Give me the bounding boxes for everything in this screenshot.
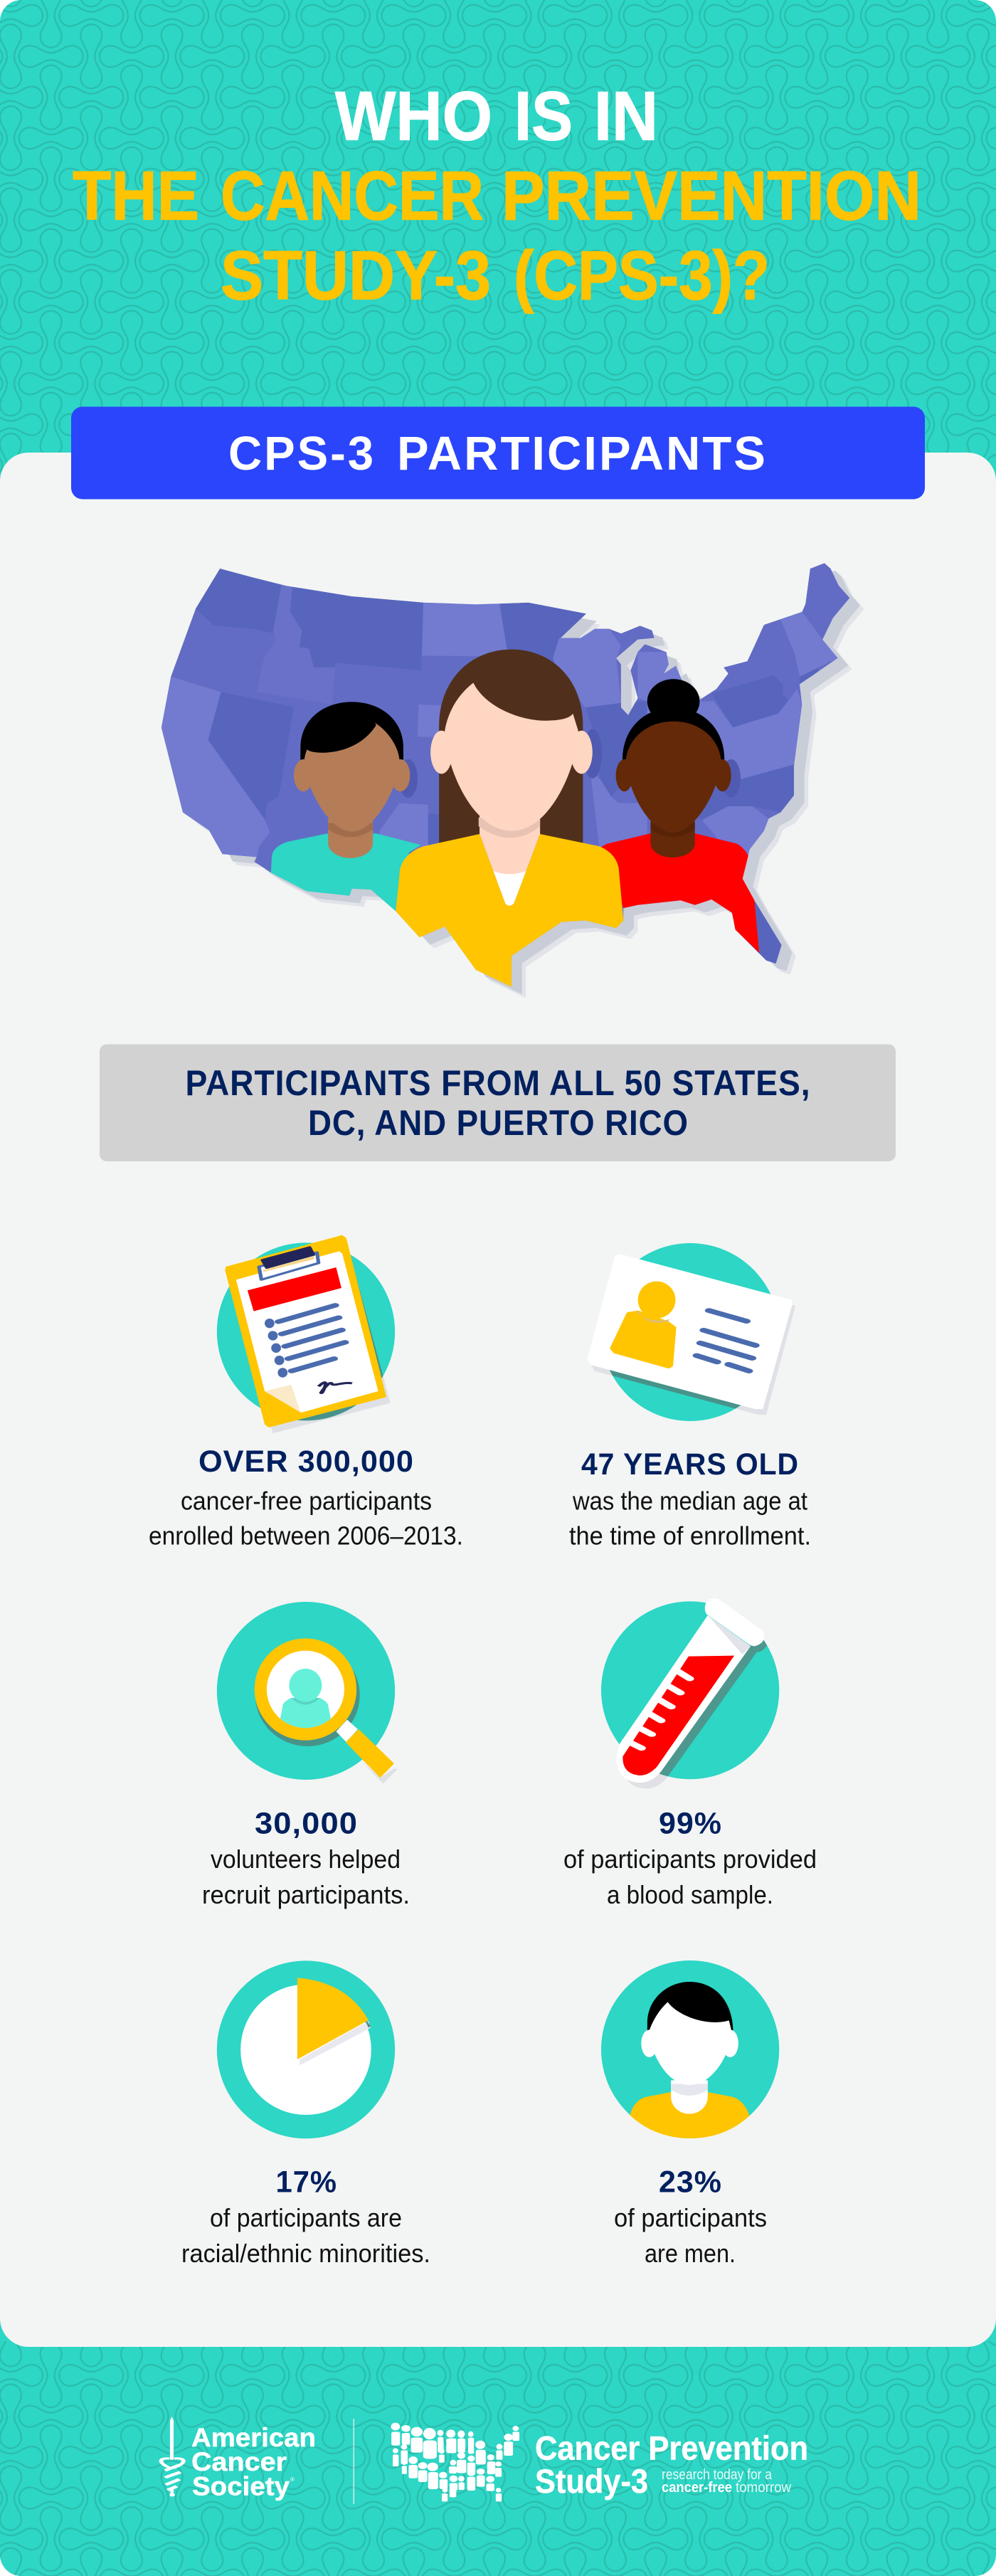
description: are men. (645, 2239, 736, 2268)
description: cancer-free participants (181, 1486, 432, 1516)
text: American Cancer Society: Society (192, 2472, 290, 2501)
panel: participants (0, 453, 996, 2347)
description: volunteers helped (211, 1844, 401, 1874)
description: enrolled between 2006–2013. (149, 1521, 463, 1550)
map shadow (172, 571, 864, 998)
tagline: tomorrow (736, 2480, 792, 2496)
title (73, 77, 921, 315)
description (569, 1486, 811, 1550)
logo: Cancer Prevention Study-3 (391, 2423, 808, 2501)
person: left, teal shirt (271, 702, 421, 911)
divider (353, 2419, 354, 2504)
description (149, 1486, 463, 1550)
title: IN (594, 77, 658, 155)
description (563, 1844, 817, 1909)
icon: sword and serpent (161, 2417, 184, 2496)
stat: over 300,000 (149, 1235, 463, 1550)
description: was the median age at (572, 1486, 807, 1516)
icon: ID card (587, 1243, 795, 1421)
map of the United States (161, 563, 849, 987)
icon: map of people (391, 2423, 519, 2501)
callout: participants from all 50 states: PARTICIPANTS FROM ALL 50 STATES, (185, 1063, 811, 1103)
text: Cancer Prevention Study-3: Study-3 (535, 2462, 648, 2500)
heading: 23%: 23% (659, 2165, 722, 2199)
heading: 47 years old: 47 YEARS OLD (581, 1447, 799, 1482)
title: THE (73, 157, 199, 235)
callout: participants from all 50 states (100, 1045, 896, 1161)
description: of participants are (210, 2203, 402, 2232)
heading: 30,000: 30,000 (255, 1806, 358, 1840)
icon: man avatar (601, 1960, 779, 2138)
icon: clipboard (217, 1235, 395, 1433)
icon: blood test tube (601, 1598, 779, 1788)
icon: pie chart (217, 1960, 395, 2138)
section heading bar: CPS-3 (228, 427, 376, 480)
description (202, 1844, 410, 1909)
heading: over 300,000: OVER 300,000 (198, 1445, 414, 1479)
text: American Cancer Society (191, 2423, 316, 2501)
icon: magnifying glass (217, 1602, 398, 1784)
stat: 23% (601, 1960, 779, 2268)
description: of participants (614, 2203, 767, 2232)
tagline (662, 2467, 792, 2496)
heading: 17%: 17% (276, 2165, 337, 2199)
person: centre, yellow shirt (396, 650, 623, 987)
text: Cancer Prevention Study-3: Cancer Prevention (535, 2429, 808, 2466)
description: a blood sample. (607, 1880, 773, 1909)
text: American Cancer Society: ® (290, 2476, 295, 2483)
title: (CPS-3)? (514, 236, 770, 315)
title: CANCER (221, 157, 484, 235)
stat: 47 years old (569, 1243, 811, 1550)
title: PREVENTION (502, 157, 921, 235)
stat: 17% (181, 1960, 430, 2268)
description (614, 2203, 767, 2268)
text: American Cancer Society: Cancer (191, 2447, 287, 2476)
section heading bar: PARTICIPANTS (397, 427, 768, 480)
text: American Cancer Society: American (191, 2423, 316, 2452)
section heading bar (71, 407, 925, 500)
heading: 99%: 99% (659, 1806, 722, 1840)
title: IS (514, 77, 573, 155)
illustration: US map with three participants (161, 563, 864, 998)
tagline: research today for a (662, 2467, 773, 2483)
text: Cancer Prevention Study-3 (535, 2429, 808, 2500)
title: STUDY-3 (221, 236, 491, 315)
person: right, red shirt (600, 679, 759, 953)
description (181, 2203, 430, 2268)
logo: American Cancer Society (161, 2417, 316, 2501)
tagline: cancer-free (662, 2480, 732, 2496)
title: WHO (335, 77, 492, 155)
description: the time of enrollment. (569, 1521, 811, 1550)
description: racial/ethnic minorities. (181, 2239, 430, 2268)
description: of participants provided (563, 1844, 817, 1874)
description: recruit participants. (202, 1880, 410, 1909)
callout: participants from all 50 states: DC, AND PUERTO RICO (308, 1103, 689, 1143)
stat: 30,000 (202, 1602, 410, 1909)
stat: 99% (563, 1598, 817, 1909)
